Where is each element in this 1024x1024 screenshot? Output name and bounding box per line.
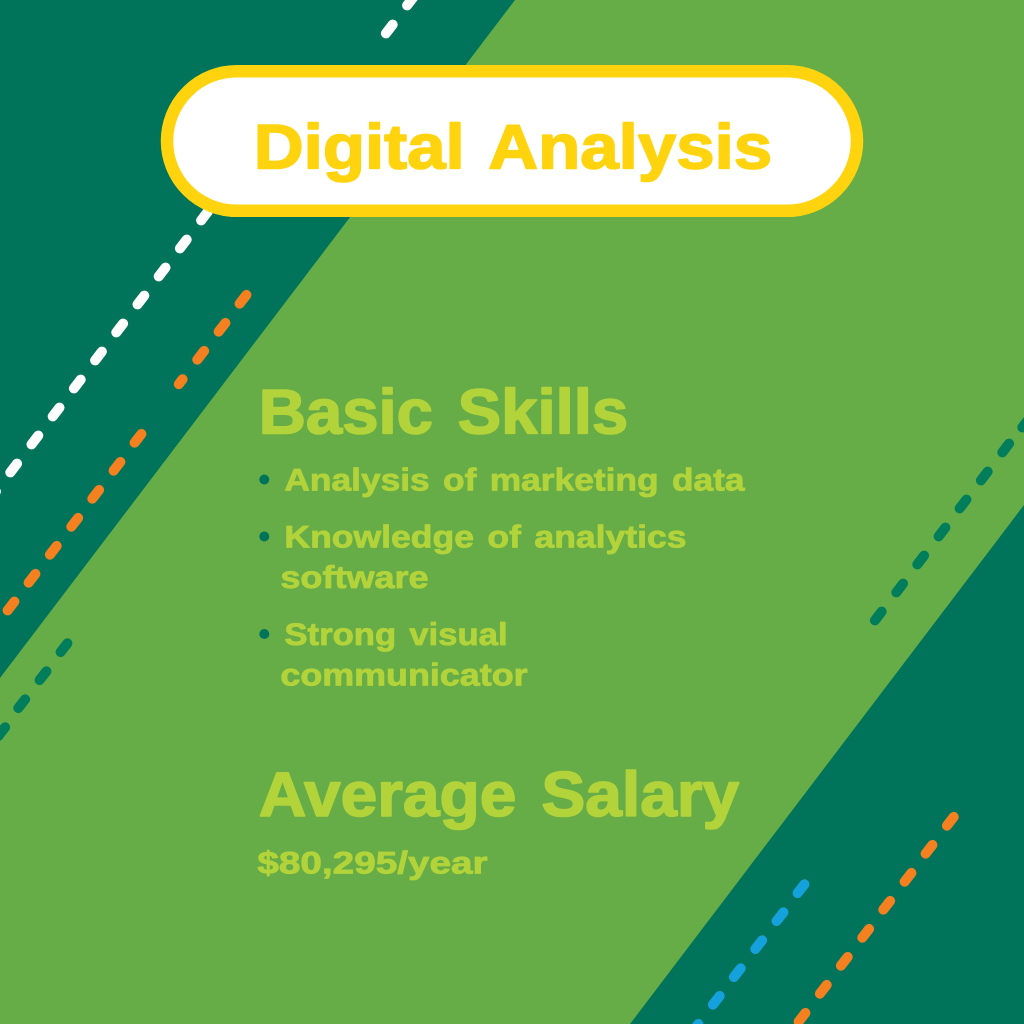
bullet 1 <box>259 474 269 484</box>
skill: analysis of marketing data: Analysis of marketing data <box>284 462 745 498</box>
skill: knowledge of analytics software <box>280 519 687 595</box>
salary value: $80,295/year <box>257 845 488 881</box>
dashed line: dark green, right <box>875 419 1024 620</box>
skill: strong visual communicator <box>280 616 528 693</box>
skill: strong visual communicator: Strong visual <box>284 616 508 652</box>
dashed line: blue, bottom right <box>692 884 804 1024</box>
heading: basic skills: Basic Skills <box>259 377 628 447</box>
bullet 2 <box>259 532 269 542</box>
title text: Digital Analysis <box>254 112 772 182</box>
skills list <box>259 462 745 693</box>
dashed line: dark green, left <box>0 643 67 736</box>
skill: strong visual communicator: communicator <box>280 657 528 693</box>
dashed line: white, top <box>386 0 414 33</box>
dark green band: bottom right <box>630 505 1024 1024</box>
heading: average salary: Average Salary <box>259 760 739 830</box>
skill: knowledge of analytics software: software <box>280 559 429 595</box>
title pill <box>167 71 857 211</box>
skill: knowledge of analytics software: Knowledge of analytics <box>284 519 687 555</box>
dark green band: top left <box>0 0 515 678</box>
bullet 3 <box>259 629 269 639</box>
dashed line: orange, bottom right <box>799 817 954 1022</box>
dashed line: white, left <box>0 212 208 500</box>
dashed line: orange, left <box>8 295 246 610</box>
